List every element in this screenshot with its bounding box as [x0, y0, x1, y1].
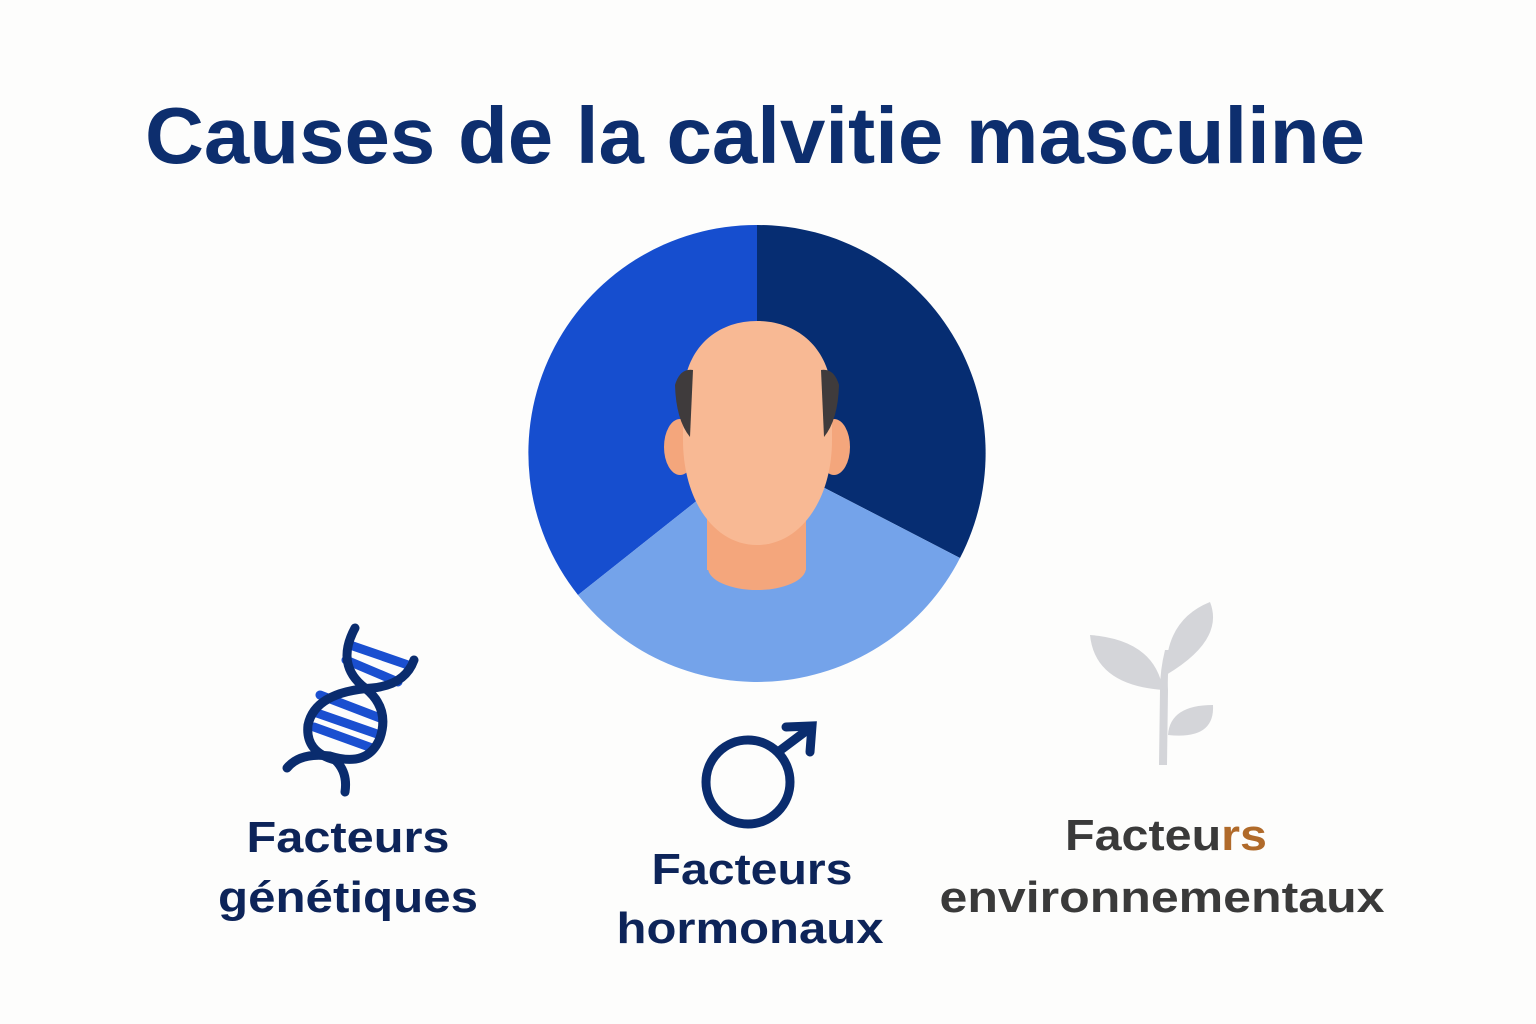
label: genetic factors: [218, 813, 478, 922]
pie: left segment: [528, 225, 757, 595]
pie chart with head: [528, 225, 986, 682]
icon: DNA: [287, 628, 414, 792]
label: genetic factors: Facteurs: [246, 813, 450, 862]
label: genetic factors: génétiques: [218, 873, 478, 922]
label: environmental factors: Facteu rs: [1065, 811, 1267, 860]
label: environmental factors: environnementaux: [940, 873, 1385, 922]
pie: bottom segment: [578, 453, 960, 682]
label: hormonal factors: Facteurs: [652, 845, 852, 894]
head illustration: [664, 321, 850, 590]
icon: plant: [1090, 602, 1213, 765]
title: Causes de la calvitie masculine: [145, 91, 1365, 180]
icon: male symbol: [706, 726, 812, 824]
label: hormonal factors: hormonaux: [616, 904, 884, 953]
label: environmental factors: [940, 811, 1385, 922]
label: hormonal factors: [616, 845, 884, 953]
pie: right segment: [757, 225, 986, 558]
